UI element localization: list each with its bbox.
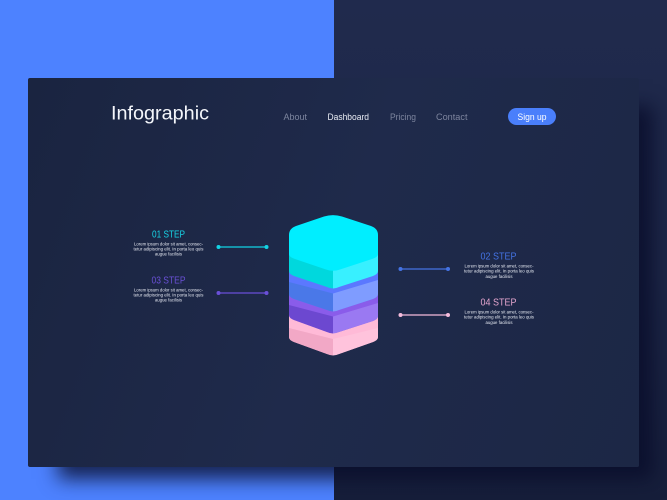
connector: step 04	[398, 313, 450, 317]
nav: Pricing: Pricing	[390, 112, 416, 123]
stacked layers chart	[289, 215, 378, 356]
text: step 04 description	[464, 310, 535, 325]
connector: step 03	[216, 291, 268, 295]
nav: Contact: Contact	[436, 112, 468, 123]
text: step 02 description: Lorem ipsum dolor sit amet, consec-	[464, 264, 534, 269]
layer: purple	[289, 292, 378, 334]
step 02 block	[464, 252, 535, 279]
step 04 block	[464, 298, 535, 325]
text: step 01 description: augue facilisis	[155, 252, 183, 257]
text: step 04 description: Lorem ipsum dolor sit amet, consec-	[464, 310, 534, 315]
title: Infographic	[111, 104, 209, 124]
layer: blue	[289, 268, 378, 312]
text: step 01 description: tetur adipiscing elit. In porta leo quis	[134, 247, 204, 252]
sign up button	[508, 108, 556, 125]
nav: About: About	[284, 112, 307, 123]
text: step 04 description: augue facilisis	[486, 320, 513, 325]
nav: Dashboard: Dashboard	[328, 112, 369, 123]
text: step 03 description: Lorem ipsum dolor sit amet, consec-	[134, 288, 204, 293]
background: blue left half	[0, 0, 334, 500]
background: navy right half	[334, 0, 667, 500]
text: step 01 description: Lorem ipsum dolor sit amet, consec-	[134, 242, 204, 247]
text: step 03 description: augue facilisis	[155, 298, 183, 303]
sign up button: Sign up	[518, 112, 546, 123]
panel: main card	[28, 78, 639, 467]
step 01 block	[134, 230, 204, 257]
connector: step 01	[216, 245, 268, 249]
layer: pink	[289, 312, 378, 356]
text: step 02 description: tetur adipiscing elit. In porta leo quis	[464, 269, 535, 274]
text: step 03 description	[134, 288, 204, 303]
heading: 02 STEP: 02 STEP	[480, 252, 517, 262]
heading: 04 STEP: 04 STEP	[480, 298, 517, 308]
text: step 01 description	[134, 242, 204, 257]
layer: cyan	[289, 215, 378, 288]
navigation menu	[284, 112, 468, 123]
text: step 04 description: tetur adipiscing elit. In porta leo quis	[464, 315, 535, 320]
heading: 03 STEP: 03 STEP	[152, 276, 186, 286]
heading: 01 STEP: 01 STEP	[152, 230, 185, 240]
text: step 02 description: augue facilisis	[486, 274, 513, 279]
text: step 03 description: tetur adipiscing elit. In porta leo quis	[134, 293, 204, 298]
step 03 block	[134, 276, 204, 303]
connector: step 02	[398, 267, 450, 271]
text: step 02 description	[464, 264, 535, 279]
